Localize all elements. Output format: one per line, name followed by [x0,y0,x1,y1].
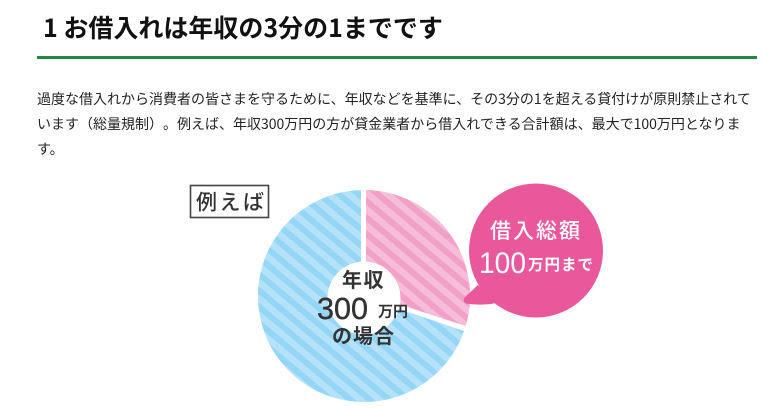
callout bubble: 借入総額 [490,215,582,245]
pie slice: blue remainder [258,190,464,402]
title underline [37,56,757,59]
label: 例えば: 例えば [196,186,266,216]
callout bubble: 100 [479,247,526,280]
pie slice: pink one third [366,190,470,326]
callout bubble [464,184,603,318]
body text: います（総量規制）。例えば、年収300万円の方が貸金業者から借入れできる合計額は、最大で100万円となりま [37,114,740,134]
centre text: の場合 [332,320,395,349]
centre text [317,264,408,349]
centre circle [328,262,400,334]
body text [37,89,751,159]
callout bubble: 万円まで [528,253,594,275]
title: 1 お借入れは年収の3分の1までです [43,9,443,45]
centre text: 万円 [378,300,408,322]
body text: 過度な借入れから消費者の皆さまを守るために、年収などを基準に、その3分の1を超える貸付けが原則禁止されて [37,89,751,109]
centre text: 300 [317,291,368,326]
body text: す。 [37,139,64,159]
centre text: 年収 [342,264,385,293]
